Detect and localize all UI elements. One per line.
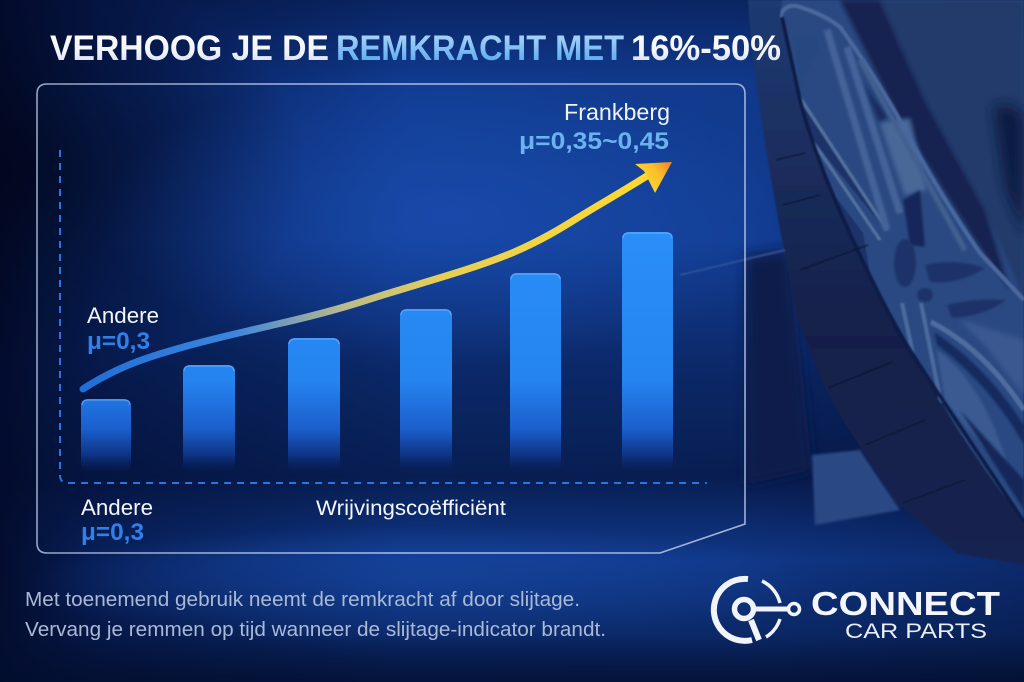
photo: car wheel and tyre: [680, 0, 1024, 565]
bottom shade: [0, 560, 1024, 682]
logo: Connect Car Parts: CAR PARTS: [845, 620, 987, 643]
title: 16%-50%: [631, 29, 781, 68]
label: Frankberg: [519, 99, 670, 155]
footer text: [25, 589, 606, 641]
label: Andere at curve start: [87, 303, 159, 355]
icon: brake connector: [714, 579, 800, 641]
arrow: rising friction curve: [83, 162, 672, 389]
title: VERHOOG JE DE: [50, 29, 329, 68]
logo: Connect Car Parts: CONNECT: [811, 585, 1000, 622]
panel: chart frame: [37, 84, 745, 553]
chart axes: [60, 150, 707, 483]
bar chart: [81, 232, 673, 471]
icon: tyre tread: [748, 0, 1024, 565]
label: Frankberg: Frankberg: [564, 99, 670, 125]
label: Andere on axis: [81, 495, 153, 546]
title: [50, 29, 781, 68]
icon: rim spokes and holes: [894, 239, 1024, 510]
title: REMKRACHT MET: [336, 29, 624, 68]
logo: Connect Car Parts: [714, 579, 1000, 643]
footer text: Met toenemend gebruik neemt de remkracht af door slijtage.: [25, 589, 580, 611]
label: Andere on axis: μ=0,3: [81, 519, 144, 546]
label: Andere at curve start: Andere: [87, 303, 159, 328]
footer text: Vervang je remmen op tijd wanneer de slijtage-indicator brandt.: [25, 619, 606, 641]
axis label: Wrijvingscoëfficiënt: [316, 497, 506, 520]
label: Andere on axis: Andere: [81, 495, 153, 520]
label: Frankberg: μ=0,35~0,45: [519, 128, 669, 155]
label: Andere at curve start: μ=0,3: [87, 328, 150, 355]
